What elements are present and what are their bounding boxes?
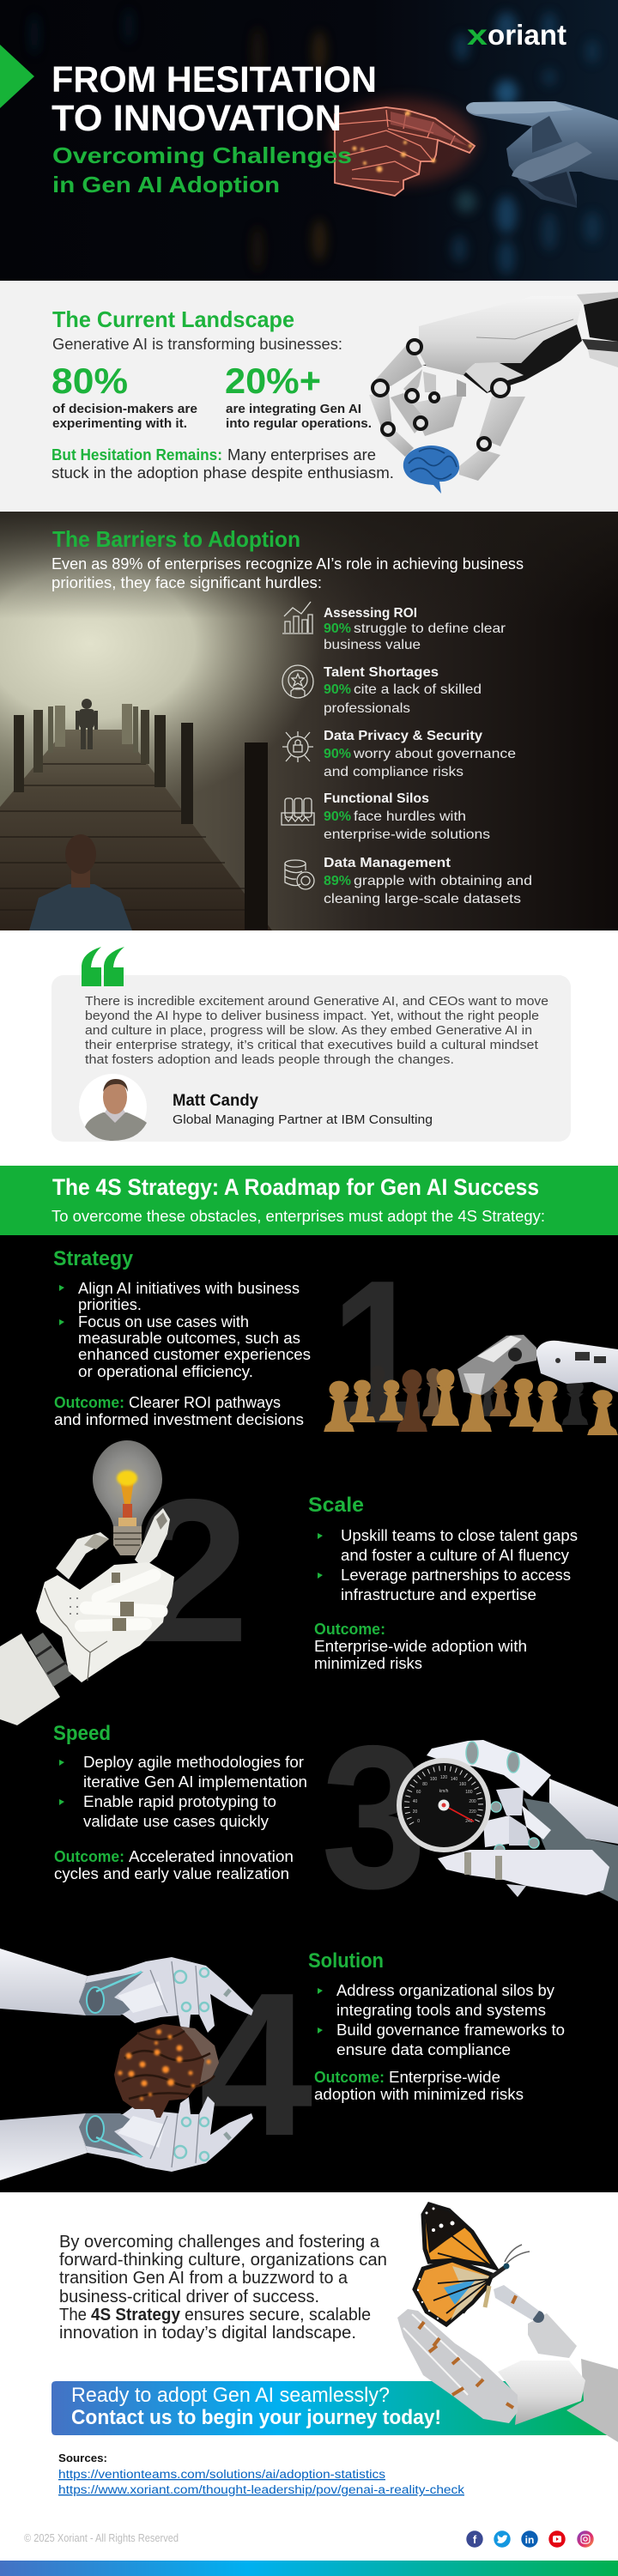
image: robot hand with speedometer: 240 — [465, 1819, 473, 1824]
barrier: assessing ROI: business value — [324, 638, 421, 652]
barrier: functional silos: face hurdles with — [354, 809, 466, 824]
sources — [58, 2452, 464, 2496]
closing text: forward-thinking culture, organizations can — [59, 2250, 387, 2270]
icon: green arrow — [0, 45, 34, 108]
outcome — [314, 2068, 524, 2103]
bullets: ensure data compliance — [336, 2040, 511, 2058]
closing text: business-critical driver of success. — [59, 2287, 319, 2306]
heading: Speed — [53, 1722, 111, 1745]
icon: database gear — [285, 860, 314, 889]
stat: 20%+: into regular operations. — [226, 417, 372, 431]
sources: https://www.xoriant.com/thought-leadership/pov/genai-a-reality-check — [58, 2483, 464, 2496]
bullets: infrastructure and expertise — [341, 1585, 536, 1603]
stat: 20%+: 20%+ — [225, 361, 321, 401]
outcome: Outcome: — [54, 1847, 124, 1865]
barrier: talent shortages: professionals — [324, 701, 410, 716]
image: robot hand with speedometer: 0 — [417, 1819, 420, 1824]
intro text — [52, 555, 524, 591]
portrait — [79, 1074, 147, 1141]
heading: Strategy — [53, 1247, 134, 1270]
image: robot hand with speedometer: 20 — [413, 1809, 417, 1815]
outcome: Enterprise-wide — [389, 2068, 500, 2086]
icon: linkedin — [521, 2531, 538, 2548]
stat: 80% — [52, 361, 197, 431]
image: robot hand with butterfly — [397, 2204, 618, 2442]
panel: 4S strategy steps — [0, 1235, 618, 2192]
hesitation text — [52, 445, 394, 482]
image: robot hand with light bulb — [0, 1440, 174, 1725]
image: pier with robot and person — [0, 699, 272, 930]
bullets — [59, 1753, 307, 1830]
barrier: assessing ROI: struggle to define clear — [354, 621, 506, 636]
barrier: functional silos: enterprise-wide solutions — [324, 827, 490, 842]
stat: 20%+ — [225, 361, 372, 431]
outcome: minimized risks — [314, 1654, 422, 1672]
image: robot hand with speedometer: 60 — [416, 1790, 421, 1795]
barrier: data privacy: Data Privacy & Security — [324, 729, 482, 743]
heading: The Barriers to Adoption — [52, 526, 300, 552]
image: robot hand with speedometer: 100 — [430, 1777, 437, 1782]
closing text — [59, 2232, 387, 2343]
stat: 20%+: are integrating Gen AI — [226, 403, 361, 416]
bullets: Deploy agile methodologies for — [83, 1753, 304, 1771]
logo: xoriant: x — [467, 19, 488, 51]
barrier: assessing ROI: 90% — [324, 621, 351, 636]
icon: quotation mark — [82, 947, 124, 986]
bullets: Align AI initiatives with business — [78, 1279, 300, 1297]
closing text: innovation in today’s digital landscape. — [59, 2323, 356, 2343]
barrier: data management: cleaning large-scale datasets — [324, 892, 521, 906]
barrier: functional silos: 90% — [324, 809, 351, 824]
closing text: 4S Strategy — [91, 2305, 181, 2324]
icon: human hand — [466, 101, 618, 208]
image: robot hand with speedometer: 120 — [440, 1775, 447, 1780]
icon: blue brain — [403, 445, 459, 494]
title: FROM HESITATION — [52, 59, 377, 100]
quote text: that fosters adoption and leads people through the changes. — [85, 1053, 454, 1067]
bullets: or operational efficiency. — [78, 1362, 253, 1380]
barrier: functional silos — [282, 791, 490, 842]
subtitle — [52, 142, 352, 197]
step 3: speed — [53, 1703, 618, 1931]
panel: conclusion — [0, 2192, 618, 2576]
bullets — [59, 1279, 311, 1380]
outcome — [54, 1393, 304, 1428]
barrier: functional silos: Functional Silos — [324, 791, 429, 806]
outcome — [54, 1847, 294, 1882]
image: robot hand with speedometer: km/h — [439, 1789, 449, 1794]
closing text: The — [59, 2305, 87, 2324]
bullets: and foster a culture of AI fluency — [341, 1546, 570, 1564]
icon: facebook: f — [473, 2533, 477, 2546]
barrier: assessing ROI — [282, 602, 506, 652]
image: chess pieces and robot hand — [324, 1335, 618, 1435]
number 4: 4 — [199, 1951, 312, 2179]
image: robot hand with speedometer: 200 — [469, 1799, 476, 1804]
image: robot hand with speedometer — [397, 1740, 618, 1901]
bullets: Focus on use cases with — [78, 1312, 249, 1330]
outcome: cycles and early value realization — [54, 1864, 289, 1882]
icon: circuit lock — [282, 731, 313, 762]
number 3: 3 — [321, 1703, 427, 1931]
image: robot hands holding glowing brain — [0, 1949, 253, 2180]
outcome: Outcome: — [314, 1620, 385, 1638]
hesitation text: But Hesitation Remains: — [52, 445, 222, 464]
bullets: measurable outcomes, such as — [78, 1329, 300, 1347]
closing text: By overcoming challenges and fostering a — [59, 2232, 380, 2252]
icon: youtube — [548, 2531, 566, 2548]
image: robot hand with speedometer: 140 — [451, 1777, 457, 1782]
barrier: assessing ROI: Assessing ROI — [324, 606, 417, 621]
outcome: Outcome: — [54, 1393, 124, 1411]
bullets — [318, 1981, 565, 2058]
icon: instagram — [577, 2531, 594, 2548]
stat: 80%: of decision-makers are — [52, 403, 197, 416]
quote text: and culture in place, progress will be slow. As they embed Generative AI in — [85, 1024, 532, 1038]
outcome — [314, 1620, 527, 1672]
title: TO INNOVATION — [52, 98, 342, 139]
bullets: priorities. — [78, 1295, 142, 1313]
number 1: 1 — [331, 1239, 425, 1466]
step 4: solution — [0, 1949, 565, 2180]
call to action banner: Ready to adopt Gen AI seamlessly? — [71, 2384, 390, 2407]
panel: quote — [0, 930, 618, 1166]
attribution: Global Managing Partner at IBM Consulting — [173, 1112, 433, 1127]
panel: current landscape — [0, 281, 618, 512]
bullets: iterative Gen AI implementation — [83, 1773, 307, 1791]
copyright: © 2025 Xoriant - All Rights Reserved — [24, 2531, 179, 2544]
subtitle: Overcoming Challenges — [52, 142, 352, 168]
sources: Sources: — [58, 2452, 107, 2464]
panel: 4S strategy banner: To overcome these obstacles, enterprises must adopt the 4S Strategy: — [52, 1208, 545, 1225]
stat: 80%: 80% — [52, 361, 128, 401]
barrier: data management: grapple with obtaining and — [354, 874, 532, 888]
barrier: data management: Data Management — [324, 856, 451, 870]
footer gradient bar — [0, 2561, 618, 2576]
intro text: priorities, they face significant hurdles: — [52, 573, 322, 591]
step 2: scale — [0, 1440, 578, 1725]
image: robot hand with speedometer: 80 — [422, 1782, 427, 1787]
icon: facebook — [466, 2531, 483, 2548]
outcome: adoption with minimized risks — [314, 2085, 524, 2103]
icon: linkedin: in — [525, 2534, 534, 2546]
barrier: talent shortages — [282, 665, 482, 716]
outcome: Clearer ROI pathways — [129, 1393, 281, 1411]
barrier: talent shortages: cite a lack of skilled — [354, 682, 482, 697]
icon: talent star — [282, 665, 313, 698]
intro line: Generative AI is transforming businesses: — [52, 335, 342, 353]
outcome: Outcome: — [314, 2068, 385, 2086]
heading: Solution — [308, 1949, 384, 1973]
icon: glowing robot hand — [330, 99, 476, 196]
call to action banner — [52, 2381, 618, 2435]
panel: 4S strategy banner — [0, 1166, 618, 1235]
icon: silos — [282, 798, 314, 825]
bullets: Upskill teams to close talent gaps — [341, 1526, 578, 1544]
bullets: enhanced customer experiences — [78, 1345, 311, 1363]
quote text: their enterprise strategy, it’s critical that executives build a cultural mindset — [85, 1039, 538, 1052]
panel: barriers — [0, 476, 618, 930]
icon: robot hand holding brain — [369, 292, 618, 494]
title — [52, 59, 377, 139]
stat: 80%: experimenting with it. — [52, 417, 187, 431]
bullets: Address organizational silos by — [336, 1981, 555, 1999]
barrier: data management: 89% — [324, 874, 351, 888]
attribution — [173, 1092, 433, 1127]
outcome: Enterprise-wide adoption with — [314, 1637, 527, 1655]
heading: Scale — [308, 1494, 364, 1517]
image: robot hand with speedometer: 40 — [413, 1799, 417, 1804]
quote text — [85, 995, 548, 1067]
barrier: data privacy: and compliance risks — [324, 765, 464, 779]
social icons — [466, 2531, 594, 2548]
panel: 4S strategy banner: The 4S Strategy: A Roadmap for Gen AI Success — [52, 1174, 539, 1200]
closing text: ensures secure, scalable — [185, 2305, 371, 2324]
barrier: data privacy: 90% — [324, 747, 351, 761]
step 1: strategy — [53, 1239, 618, 1466]
heading: The Current Landscape — [52, 306, 294, 332]
attribution: Matt Candy — [173, 1092, 258, 1110]
number 2: 2 — [136, 1458, 249, 1685]
intro text: Even as 89% of enterprises recognize AI’s role in achieving business — [52, 555, 524, 573]
hesitation text: stuck in the adoption phase despite enthusiasm. — [52, 464, 394, 482]
bullets: Leverage partnerships to access — [341, 1566, 571, 1584]
icon: chart — [282, 602, 313, 633]
panel: hero — [0, 0, 618, 281]
logo: xoriant: oriant — [488, 19, 566, 51]
bullets: Build governance frameworks to — [336, 2021, 565, 2039]
bullets — [318, 1526, 578, 1603]
outcome: and informed investment decisions — [54, 1410, 304, 1428]
quote text: There is incredible excitement around Generative AI, and CEOs want to move — [85, 995, 548, 1009]
barrier: data management — [285, 856, 532, 906]
sources: https://ventionteams.com/solutions/ai/adoption-statistics — [58, 2468, 385, 2481]
bullets: validate use cases quickly — [83, 1812, 270, 1830]
outcome: Accelerated innovation — [129, 1847, 294, 1865]
quote card — [52, 975, 571, 1142]
barrier: talent shortages: 90% — [324, 682, 351, 697]
image: robot hand with speedometer: 220 — [469, 1809, 476, 1815]
subtitle: in Gen AI Adoption — [52, 172, 280, 197]
barrier: talent shortages: Talent Shortages — [324, 665, 439, 680]
call to action banner: Contact us to begin your journey today! — [71, 2406, 441, 2429]
image: robot hand with speedometer: 180 — [465, 1790, 473, 1795]
closing text: transition Gen AI from a buzzword to a — [59, 2268, 348, 2288]
barrier: data privacy: worry about governance — [353, 747, 516, 761]
bullets: Enable rapid prototyping to — [83, 1792, 276, 1810]
hesitation text: Many enterprises are — [227, 445, 376, 464]
bullets: integrating tools and systems — [336, 2001, 546, 2019]
quote text: beyond the AI hype to deliver business impact. Yet, without the right people — [85, 1009, 539, 1023]
barrier: data privacy — [282, 729, 516, 779]
icon: twitter — [494, 2531, 511, 2548]
image: robot hand with speedometer: 160 — [459, 1782, 466, 1787]
